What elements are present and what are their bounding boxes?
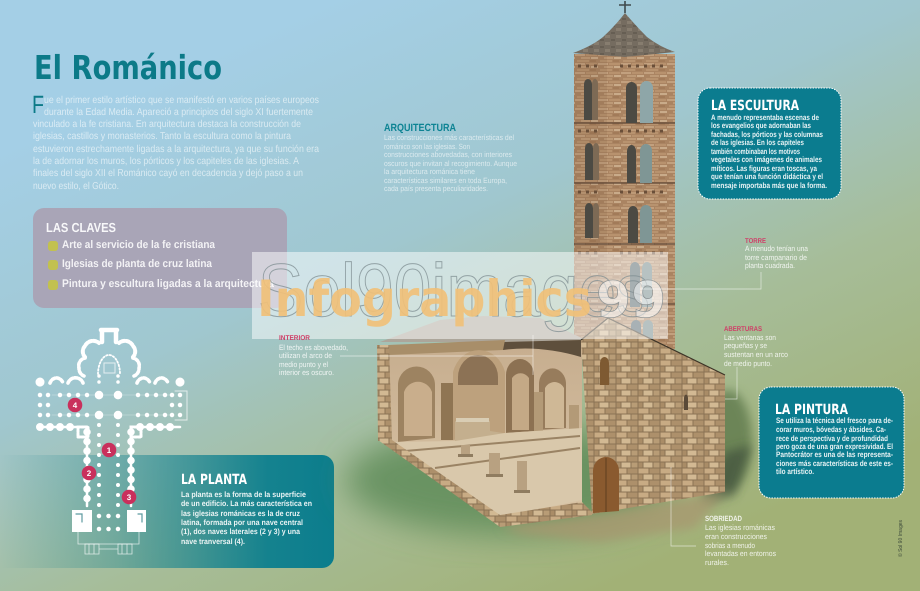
panel: la pintura: ciones más características de este es- — [776, 459, 893, 468]
watermark panel — [252, 252, 668, 339]
column stumps — [461, 445, 527, 491]
label: sobriedad: rurales. — [705, 558, 729, 567]
label: interior: El techo es abovedado, — [279, 343, 348, 352]
intro text block: la de adornar los muros, los pórticos y los capiteles de las iglesias. A — [33, 156, 299, 167]
label: arquitectura: características similares en toda Europa, — [384, 176, 507, 185]
intro text block: nuevo estilo, el Gótico. — [33, 181, 119, 192]
panel: la planta — [0, 455, 334, 568]
floor plan of the church — [40, 330, 187, 554]
panel: la escultura: que tenían una función didáctica y el — [711, 172, 823, 181]
heading: las claves: LAS CLAVES — [46, 220, 116, 235]
bullet 1: Arte al servicio de la fe cristiana — [62, 239, 216, 251]
nave roof — [380, 316, 590, 342]
label: arquitectura: la arquitectura románica tiene — [384, 167, 475, 176]
left wall arch — [398, 367, 435, 442]
low walls — [378, 440, 592, 527]
credit: © Sol 90 Images — [898, 520, 904, 557]
intro text block: estuvieron estrechamente ligadas a la arquitectura, ya que su función era — [33, 144, 319, 155]
intro text block — [32, 91, 319, 192]
label: interior: medio punto y el — [279, 360, 328, 369]
label: sobriedad: sobrias a menudo — [705, 541, 755, 550]
label: torre: TORRE — [745, 238, 766, 245]
label: sobriedad: eran construcciones — [705, 532, 767, 541]
bullet 2: Iglesias de planta de cruz latina — [62, 258, 213, 270]
panel: la pintura: pero goza de una gran expresividad. El — [776, 442, 893, 451]
door — [593, 457, 619, 513]
label: aberturas: ABERTURAS — [724, 326, 762, 333]
label: interior: interior es oscuro. — [279, 368, 334, 377]
watermark outline text: Sol90images — [258, 248, 650, 332]
label: aberturas: de medio punto. — [724, 359, 772, 368]
intro text block: iglesias, castillos y monasterios. Tanto la escultura como la pintura — [33, 131, 291, 142]
panel: la escultura: vegetales con imágenes de animales — [711, 155, 823, 164]
la planta text: (1), dos naves laterales (2 y 3) y una — [181, 527, 301, 536]
la planta text: latina, formada por una nave central — [181, 518, 303, 527]
label: interior: utilizan el arco de — [279, 351, 332, 360]
tower windows — [584, 79, 653, 345]
label: aberturas: sustentan en un arco — [724, 350, 788, 359]
drop cap: F — [32, 91, 44, 119]
badge 2: 2 — [87, 469, 92, 478]
floor — [392, 428, 582, 517]
badge 3: 3 — [127, 493, 132, 502]
church cutaway — [377, 316, 725, 527]
heading: arquitectura: ARQUITECTURA — [384, 122, 456, 134]
portico — [78, 532, 139, 554]
badge 1: 1 — [107, 446, 112, 455]
intro text block: vinculado a la fe cristiana. En arquitectura destaca la construcción de — [33, 119, 301, 130]
label: arquitectura: Las construcciones más características del — [384, 133, 514, 142]
facade window — [600, 357, 609, 385]
label: aberturas — [724, 326, 788, 368]
panel: la pintura: Pantocrátor es una de las representa- — [776, 450, 893, 459]
badge 4: 4 — [73, 401, 78, 410]
altar — [455, 421, 503, 441]
interior columns — [532, 392, 579, 465]
panel: la escultura: de las iglesias. En los capiteles — [711, 138, 805, 147]
transept walls — [40, 378, 187, 427]
la planta text: de un edificio. La más característica en — [181, 499, 312, 508]
sobriedad leader — [671, 467, 696, 546]
heading: la planta: LA PLANTA — [181, 472, 247, 488]
tower roof — [573, 13, 675, 57]
label: arquitectura: cada país presenta peculiaridades. — [384, 184, 488, 193]
panel: la escultura — [698, 88, 841, 199]
la planta text: nave tranversal (4). — [181, 537, 245, 546]
la planta text: La planta es la forma de la superficie — [181, 490, 307, 499]
label: interior: INTERIOR — [279, 335, 310, 342]
label: torre: torre campanario de — [745, 253, 807, 262]
panel: la escultura: fachadas, los pórticos y las columnas — [711, 130, 824, 139]
leader lines — [340, 272, 761, 546]
panel: la escultura: A menudo representaba escenas de — [711, 113, 820, 122]
label: arquitectura: románico son las iglesias. Son — [384, 142, 470, 151]
label: arquitectura — [384, 122, 517, 193]
side arches — [506, 359, 534, 433]
label: aberturas: pequeñas y se — [724, 341, 767, 350]
grass around the church — [345, 390, 752, 542]
ceiling shadow — [503, 340, 581, 357]
label: sobriedad: SOBRIEDAD — [705, 514, 742, 523]
intro text block: finales del siglo XII el Románico cayó en decadencia y dejó paso a un — [33, 168, 303, 179]
bell tower — [573, 1, 675, 349]
label: torre: planta cuadrada. — [745, 261, 795, 270]
label: torre — [745, 238, 809, 270]
label: interior — [279, 335, 348, 377]
interior leader — [340, 335, 533, 375]
heading: la escultura: LA ESCULTURA — [711, 98, 799, 114]
intro text block: durante la Edad Media. Apareció a principios del siglo XI fuertemente — [44, 107, 313, 118]
la planta text — [181, 472, 312, 546]
apse and chapels — [79, 330, 139, 386]
label: torre: A menudo tenían una — [745, 244, 809, 253]
bullet 3: Pintura y escultura ligadas a la arquitectura — [62, 278, 275, 290]
panel: la pintura: Se utiliza la técnica del fresco para de- — [776, 416, 893, 425]
panel: la escultura: mensaje importaba más que la forma. — [711, 181, 827, 190]
label: sobriedad: Las iglesias románicas — [705, 523, 775, 532]
panel: la escultura: los evangelios que adornaban las — [711, 121, 812, 130]
pilaster — [441, 383, 453, 440]
interior walls — [388, 340, 582, 515]
label: arquitectura: oscuros que invitan al recogimiento. Aunque — [384, 159, 517, 168]
panel: la escultura: míticos. Las figuras eran toscas, ya — [711, 164, 818, 173]
number badges on the plan — [68, 398, 136, 504]
panel: la pintura: rece de perspectiva y de profundidad — [776, 434, 888, 443]
panel: la pintura — [759, 387, 904, 498]
nave walls and columns — [78, 425, 141, 529]
watermark — [252, 248, 668, 339]
label: aberturas: Las ventanas son — [724, 333, 776, 342]
label: arquitectura: construcciones abovedadas, con interiores — [384, 150, 512, 159]
label: sobriedad — [705, 514, 776, 567]
watermark number: 99 — [596, 271, 666, 329]
apse — [453, 350, 505, 440]
label: sobriedad: levantadas en entornos — [705, 549, 776, 558]
intro text block: ue el primer estilo artístico que se manifestó en varios países europeos — [44, 95, 319, 106]
corner towers — [72, 510, 146, 532]
tower shaft — [574, 54, 675, 349]
aberturas leader — [725, 367, 737, 399]
la planta text: las iglesias románicas es la de cruz — [181, 509, 300, 518]
panel: la pintura: corar muros, bóvedas y ábsides. Ca- — [776, 425, 886, 434]
panel: la escultura: también combinaban los motivos — [711, 147, 800, 156]
panel: las claves — [33, 208, 287, 308]
tower cross — [619, 1, 631, 13]
title: El Románico — [34, 48, 222, 87]
torre leader — [640, 272, 761, 289]
side slit — [684, 395, 688, 410]
panel: la pintura: tilo artístico. — [776, 467, 814, 476]
heading: la pintura: LA PINTURA — [775, 402, 848, 418]
watermark logo text: Infographics — [257, 270, 592, 328]
facade — [581, 318, 725, 514]
